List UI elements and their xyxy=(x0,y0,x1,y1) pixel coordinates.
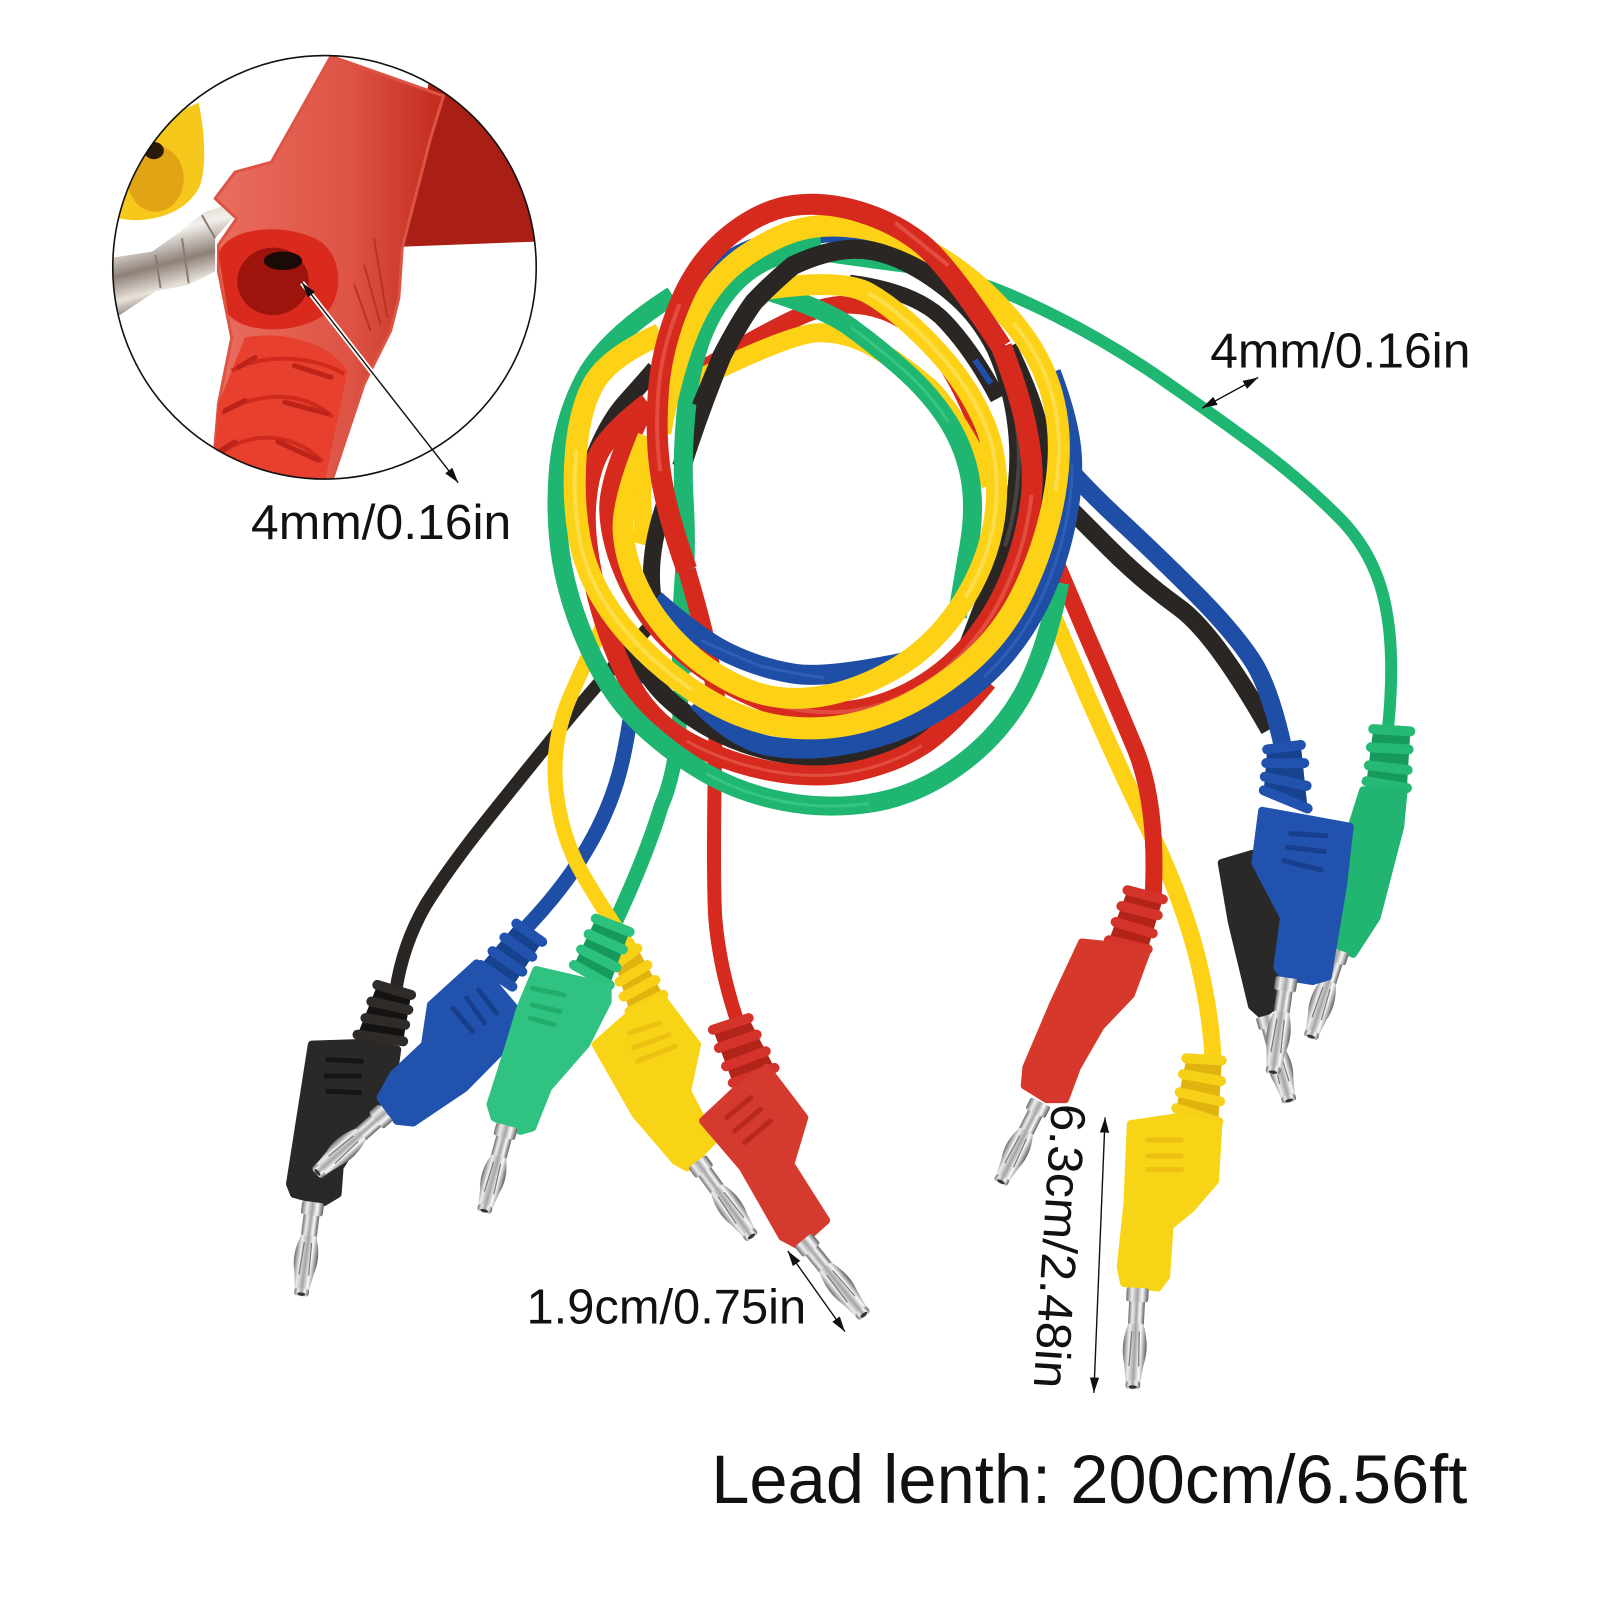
icon: grip lines xyxy=(354,238,387,331)
plug: yellow right xyxy=(1121,1058,1222,1288)
plug: green right xyxy=(1329,729,1410,954)
wire diameter arrow xyxy=(1202,378,1258,408)
icon: socket rim and hole xyxy=(218,229,338,329)
plug: black right xyxy=(1222,854,1282,1015)
metal pins of right plugs xyxy=(989,946,1350,1390)
icon: yellow plug end xyxy=(113,103,204,220)
coiled cables xyxy=(557,204,1072,806)
green outer ring right segment xyxy=(869,583,1060,803)
red lower ring xyxy=(610,347,1032,712)
icon: red plug body xyxy=(212,56,444,483)
plug: red right xyxy=(1025,890,1163,1099)
icon: ribbed strain relief xyxy=(212,335,348,483)
red top loop xyxy=(657,204,1001,570)
blue main ring xyxy=(697,373,1072,749)
blue inner ring xyxy=(655,600,906,678)
inset circle outline xyxy=(113,56,536,479)
pin length arrow xyxy=(788,1251,845,1332)
black overlay crossing the top xyxy=(701,249,904,407)
yellow outer ring xyxy=(575,226,1059,728)
icon: dark rear plug body xyxy=(404,84,534,247)
metal pin of blue right plug xyxy=(1261,976,1299,1076)
green cable through the centre xyxy=(681,246,821,673)
label: plug length: 6.3cm/2.48in xyxy=(1023,1102,1095,1390)
black stub at left xyxy=(651,501,666,608)
plug: blue right xyxy=(1255,745,1350,981)
circular inset: socket close-up xyxy=(114,56,534,478)
blue sliver xyxy=(975,360,991,383)
label: wire diameter: 4mm/0.16in xyxy=(1210,324,1470,378)
green inner ring xyxy=(761,289,973,617)
metal pins of left plugs xyxy=(289,1103,874,1324)
green outer ring xyxy=(557,296,869,806)
yellow inner ring xyxy=(623,285,997,698)
test leads behind the coil xyxy=(396,253,1391,1066)
black cable segments xyxy=(584,249,1042,758)
right plugs xyxy=(1025,729,1410,1288)
left plugs xyxy=(290,919,826,1245)
inset arrow xyxy=(302,283,458,483)
label: socket size: 4mm/0.16in xyxy=(251,496,511,550)
plug: yellow xyxy=(596,948,713,1167)
inner red and back yellow cables xyxy=(641,305,991,544)
blue cable top segments xyxy=(676,236,874,334)
plug: green xyxy=(491,919,630,1131)
plug: black xyxy=(290,985,411,1202)
red cable dropping to centre lead xyxy=(687,570,717,703)
label: pin length: 1.9cm/0.75in xyxy=(527,1280,806,1334)
plug: red xyxy=(703,1018,826,1245)
icon: metal banana pin xyxy=(109,205,237,318)
outer lower red cable xyxy=(586,403,987,776)
plug: blue xyxy=(381,924,542,1123)
label: lead length: Lead lenth: 200cm/6.56ft xyxy=(711,1442,1467,1518)
plug length arrow xyxy=(1094,1117,1105,1393)
